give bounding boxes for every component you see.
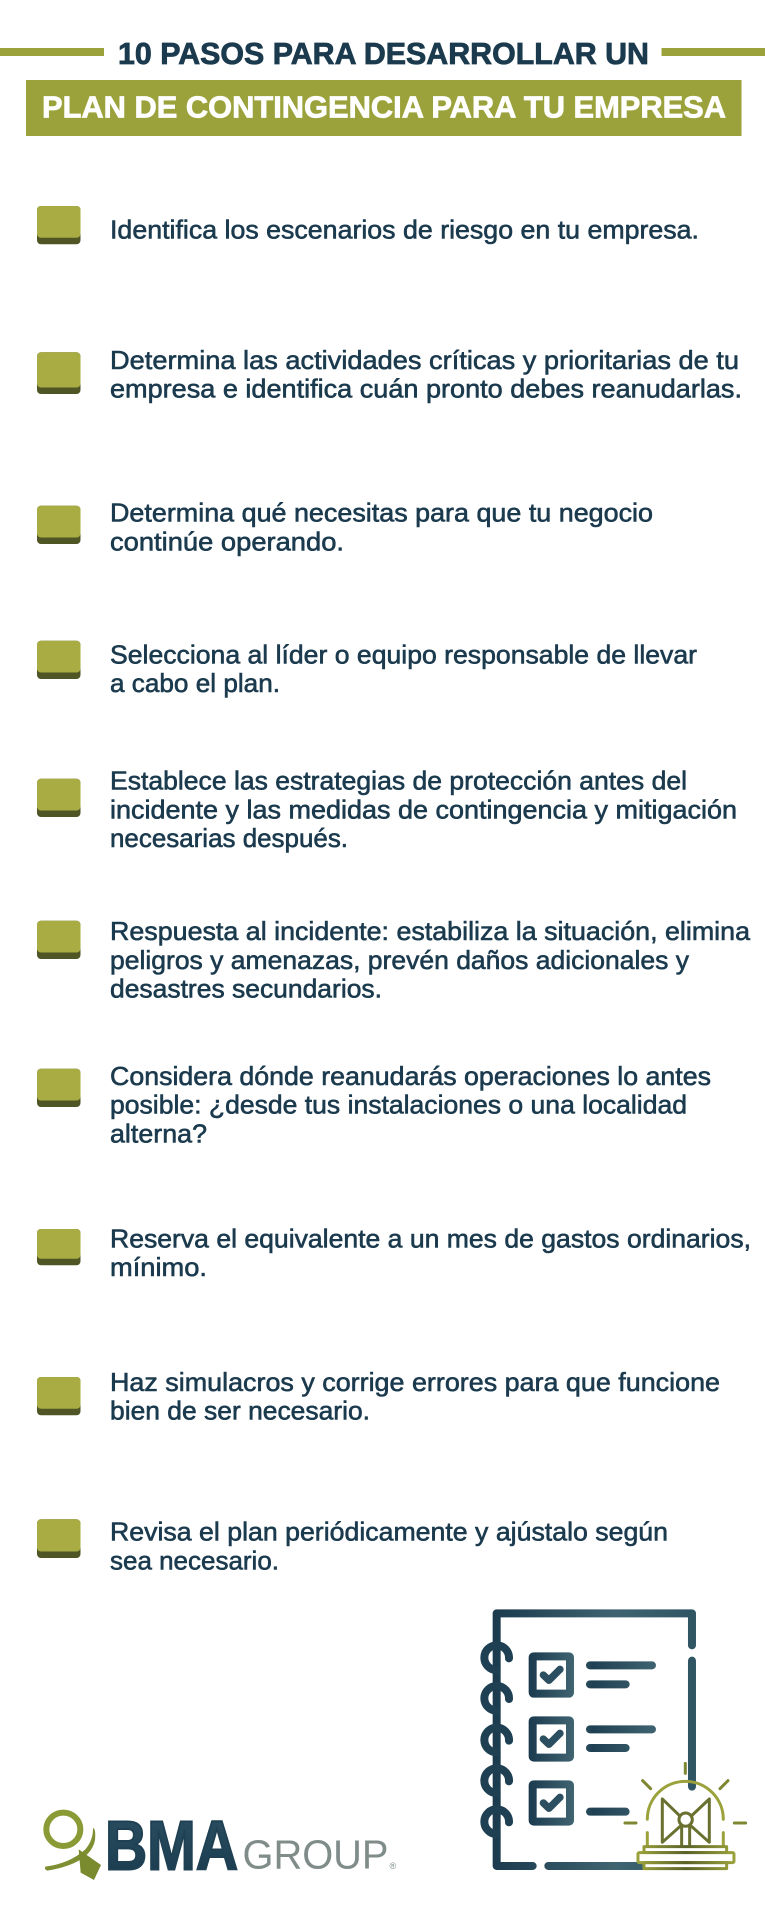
step 4: a cabo el plan. xyxy=(110,668,280,698)
title banner: plan de contingencia para tu empresa: PLAN DE CONTINGENCIA PARA TU EMPRESA xyxy=(42,90,726,125)
step 10: sea necesario. xyxy=(110,1546,279,1576)
step 5: incidente y las medidas de contingencia y mitigación xyxy=(110,794,737,824)
step 6: Respuesta al incidente: estabiliza la situación, elimina xyxy=(110,916,751,946)
logo: BMA Group: ® xyxy=(390,1861,396,1871)
step 2: empresa e identifica cuán pronto debes reanudarlas. xyxy=(110,374,742,404)
logo: BMA Group: GROUP xyxy=(242,1831,388,1877)
step 7: alterna? xyxy=(110,1119,207,1149)
step 7: posible: ¿desde tus instalaciones o una localidad xyxy=(110,1090,687,1120)
step 8 xyxy=(37,1223,751,1282)
step 9 xyxy=(37,1367,720,1426)
step 6: desastres secundarios. xyxy=(110,974,382,1004)
step 5: Establece las estrategias de protección antes del xyxy=(110,765,687,795)
step 5 xyxy=(37,765,737,853)
icon: spiral notebook checklist xyxy=(484,1613,692,1866)
title line: 10 pasos para desarrollar un: 10 PASOS PARA DESARROLLAR UN xyxy=(118,36,649,71)
step 7: Considera dónde reanudarás operaciones lo antes xyxy=(110,1061,711,1091)
title banner: plan de contingencia para tu empresa xyxy=(26,80,742,136)
step 6 xyxy=(37,916,751,1004)
step 1 xyxy=(37,206,699,244)
step 10: Revisa el plan periódicamente y ajústalo según xyxy=(110,1517,668,1547)
step 3: Determina qué necesitas para que tu negocio xyxy=(110,498,653,528)
step 4 xyxy=(37,639,697,698)
logo: BMA Group xyxy=(45,1806,396,1884)
step 4: Selecciona al líder o equipo responsable de llevar xyxy=(110,639,697,669)
step 9: bien de ser necesario. xyxy=(110,1396,370,1426)
step 3: continúe operando. xyxy=(110,527,344,557)
step 2 xyxy=(37,345,742,404)
step 3 xyxy=(37,498,653,557)
logo mark: magnifier and tie xyxy=(45,1813,101,1880)
step 7 xyxy=(37,1061,711,1149)
icon: alarm siren xyxy=(625,1763,746,1869)
step 8: Reserva el equivalente a un mes de gastos ordinarios, xyxy=(110,1223,751,1253)
step 9: Haz simulacros y corrige errores para que funcione xyxy=(110,1367,720,1397)
step 8: mínimo. xyxy=(110,1252,207,1282)
step 6: peligros y amenazas, prevén daños adicionales y xyxy=(110,945,689,975)
step 1: Identifica los escenarios de riesgo en tu empresa. xyxy=(110,214,699,244)
step 5: necesarias después. xyxy=(110,823,348,853)
step 10 xyxy=(37,1517,668,1576)
logo: BMA Group: BMA xyxy=(105,1806,238,1884)
step 2: Determina las actividades críticas y prioritarias de tu xyxy=(110,345,739,375)
